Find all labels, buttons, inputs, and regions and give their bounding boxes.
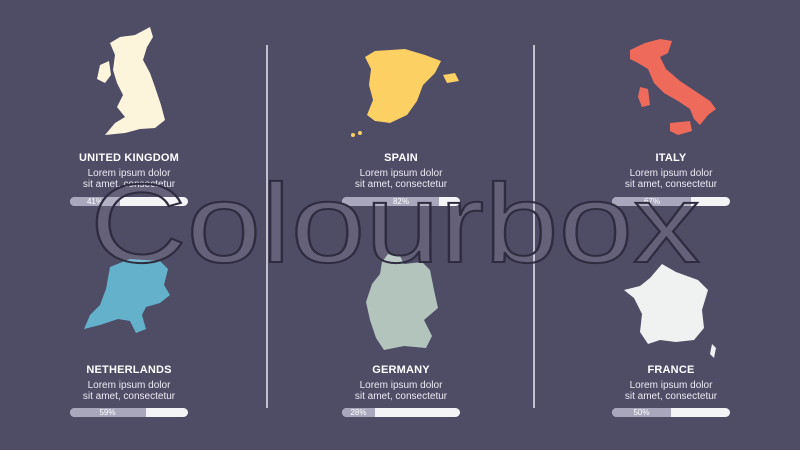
panel: netherlands (83, 364, 175, 402)
heading: germany: GERMANY (372, 364, 430, 376)
text block: Lorem ipsum dolor (360, 168, 442, 179)
text block: sit amet, consectetur (83, 179, 175, 190)
heading: united kingdom: UNITED KINGDOM (79, 152, 179, 164)
bar: 41% (70, 197, 188, 206)
text block (625, 168, 717, 190)
map: netherlands (84, 259, 170, 333)
text block (625, 380, 717, 402)
panel: united kingdom (79, 152, 179, 190)
text block: Lorem ipsum dolor (360, 380, 442, 391)
text block (355, 168, 447, 190)
text block: Lorem ipsum dolor (630, 380, 712, 391)
text block (83, 380, 175, 402)
heading: netherlands: NETHERLANDS (86, 364, 172, 376)
bar: 67%: 67% (644, 197, 660, 206)
panel: france (625, 364, 717, 402)
bar: 59%: 59% (99, 408, 116, 417)
text block: sit amet, consectetur (355, 179, 447, 190)
bar: 82% (342, 197, 460, 206)
map: france (624, 264, 716, 358)
heading: italy: ITALY (656, 152, 686, 164)
text block: Lorem ipsum dolor (88, 168, 170, 179)
panel: germany (355, 364, 447, 402)
bar: 50%: 50% (633, 408, 650, 417)
bar: 28%: 28% (350, 408, 366, 417)
bar: 67% (612, 197, 730, 206)
map: spain (351, 49, 459, 137)
map: germany (366, 254, 438, 350)
map: italy (630, 39, 716, 135)
heading: france: FRANCE (647, 364, 695, 376)
bar: 59% (70, 408, 188, 417)
heading: spain: SPAIN (384, 152, 418, 164)
text block: sit amet, consectetur (83, 391, 175, 402)
text block: sit amet, consectetur (625, 391, 717, 402)
text block: Lorem ipsum dolor (88, 380, 170, 391)
bar: 28% (342, 408, 460, 417)
panel: spain (355, 152, 447, 190)
text block (83, 168, 175, 190)
text block: sit amet, consectetur (625, 179, 717, 190)
bar: 41%: 41% (87, 197, 103, 206)
bar: 82%: 82% (393, 197, 409, 206)
text block: sit amet, consectetur (355, 391, 447, 402)
bar: 50% (612, 408, 730, 417)
panel: italy (625, 152, 717, 190)
text block (355, 380, 447, 402)
watermark: Colourbox (90, 161, 700, 286)
map: united kingdom (97, 27, 165, 135)
text block: Lorem ipsum dolor (630, 168, 712, 179)
